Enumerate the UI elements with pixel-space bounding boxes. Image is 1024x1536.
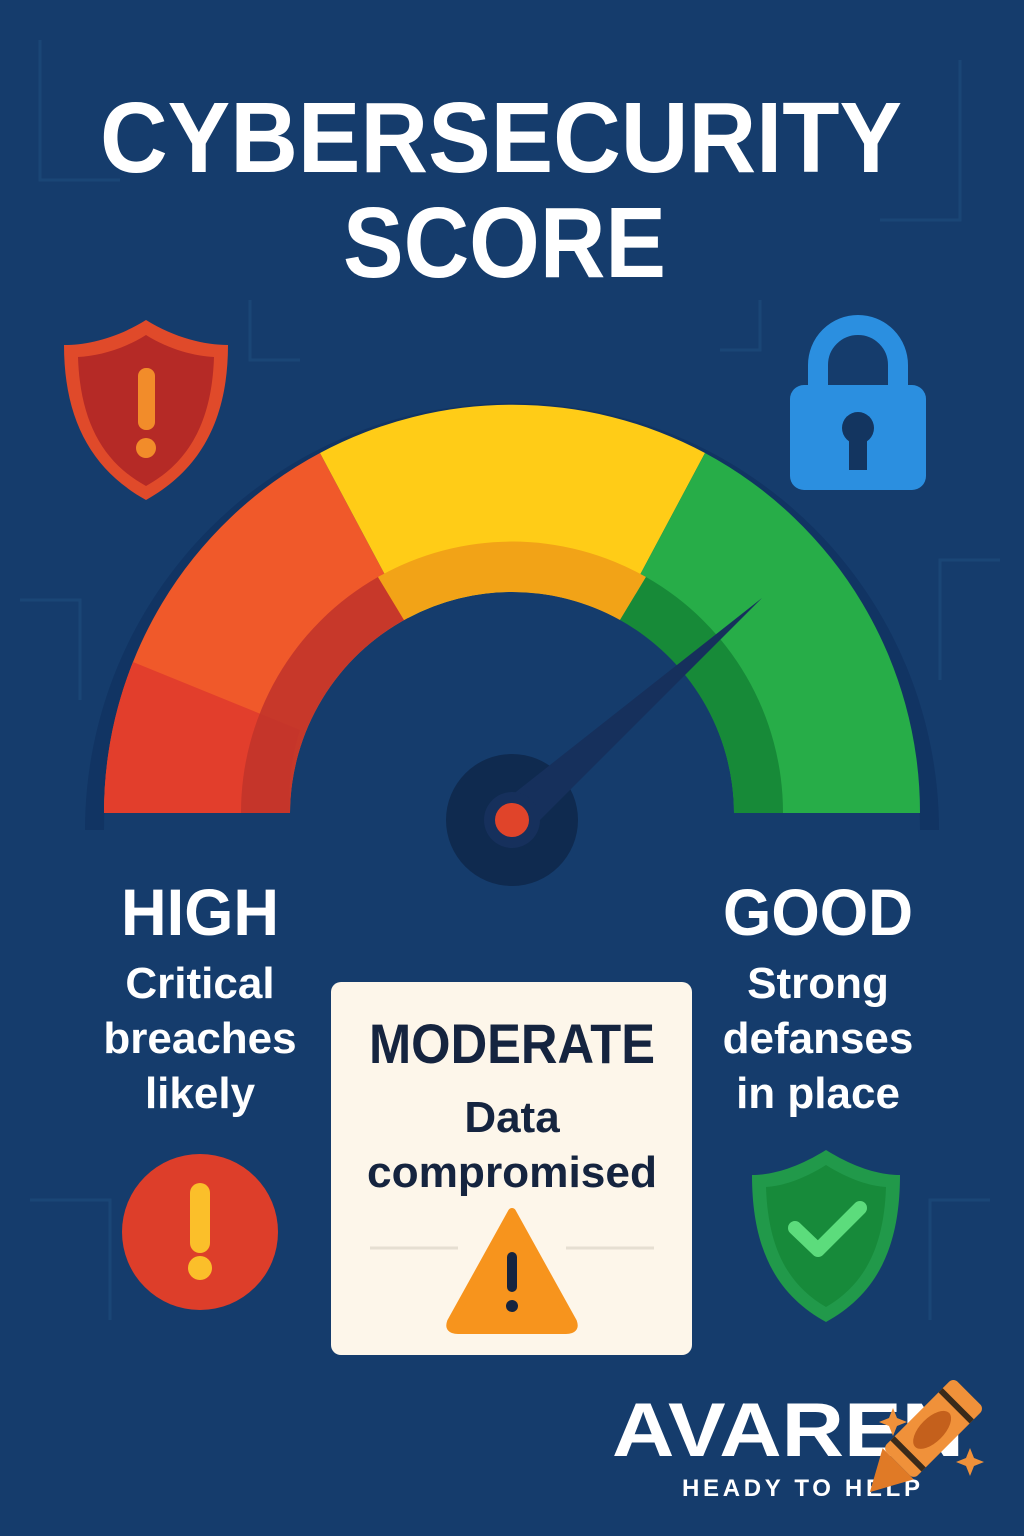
icon: green check shield: [752, 1150, 900, 1322]
panel: moderate: MODERATE: [369, 1012, 655, 1075]
title: [100, 82, 902, 299]
logo: AVAREN: [612, 1388, 964, 1473]
logo: [612, 1378, 984, 1508]
text: GOOD: GOOD: [723, 875, 913, 949]
title: SCORE: [343, 187, 666, 299]
needle: [446, 598, 762, 886]
title: CYBERSECURITY: [100, 82, 902, 194]
text: GOOD: Strong: [747, 959, 889, 1008]
icon: blue padlock: [790, 325, 926, 490]
icon: warning triangle: [450, 1212, 574, 1330]
text: GOOD: [723, 875, 913, 1118]
icon: red alert circle: [122, 1154, 278, 1310]
logo: HEADY TO HELP: [682, 1475, 920, 1502]
text: GOOD: defanses: [723, 1014, 913, 1063]
panel: moderate: Data: [464, 1093, 560, 1142]
text: HIGH: Critical: [125, 959, 275, 1008]
icon: red warning shield: [64, 320, 228, 500]
text: HIGH: likely: [145, 1069, 256, 1118]
text: HIGH: breaches: [103, 1014, 297, 1063]
gauge: [85, 403, 939, 886]
panel: moderate: compromised: [367, 1148, 657, 1197]
text: HIGH: [103, 875, 297, 1118]
icon: crayon: [854, 1378, 984, 1508]
panel: moderate: [331, 982, 692, 1355]
text: GOOD: in place: [736, 1069, 900, 1118]
text: HIGH: HIGH: [121, 875, 279, 949]
